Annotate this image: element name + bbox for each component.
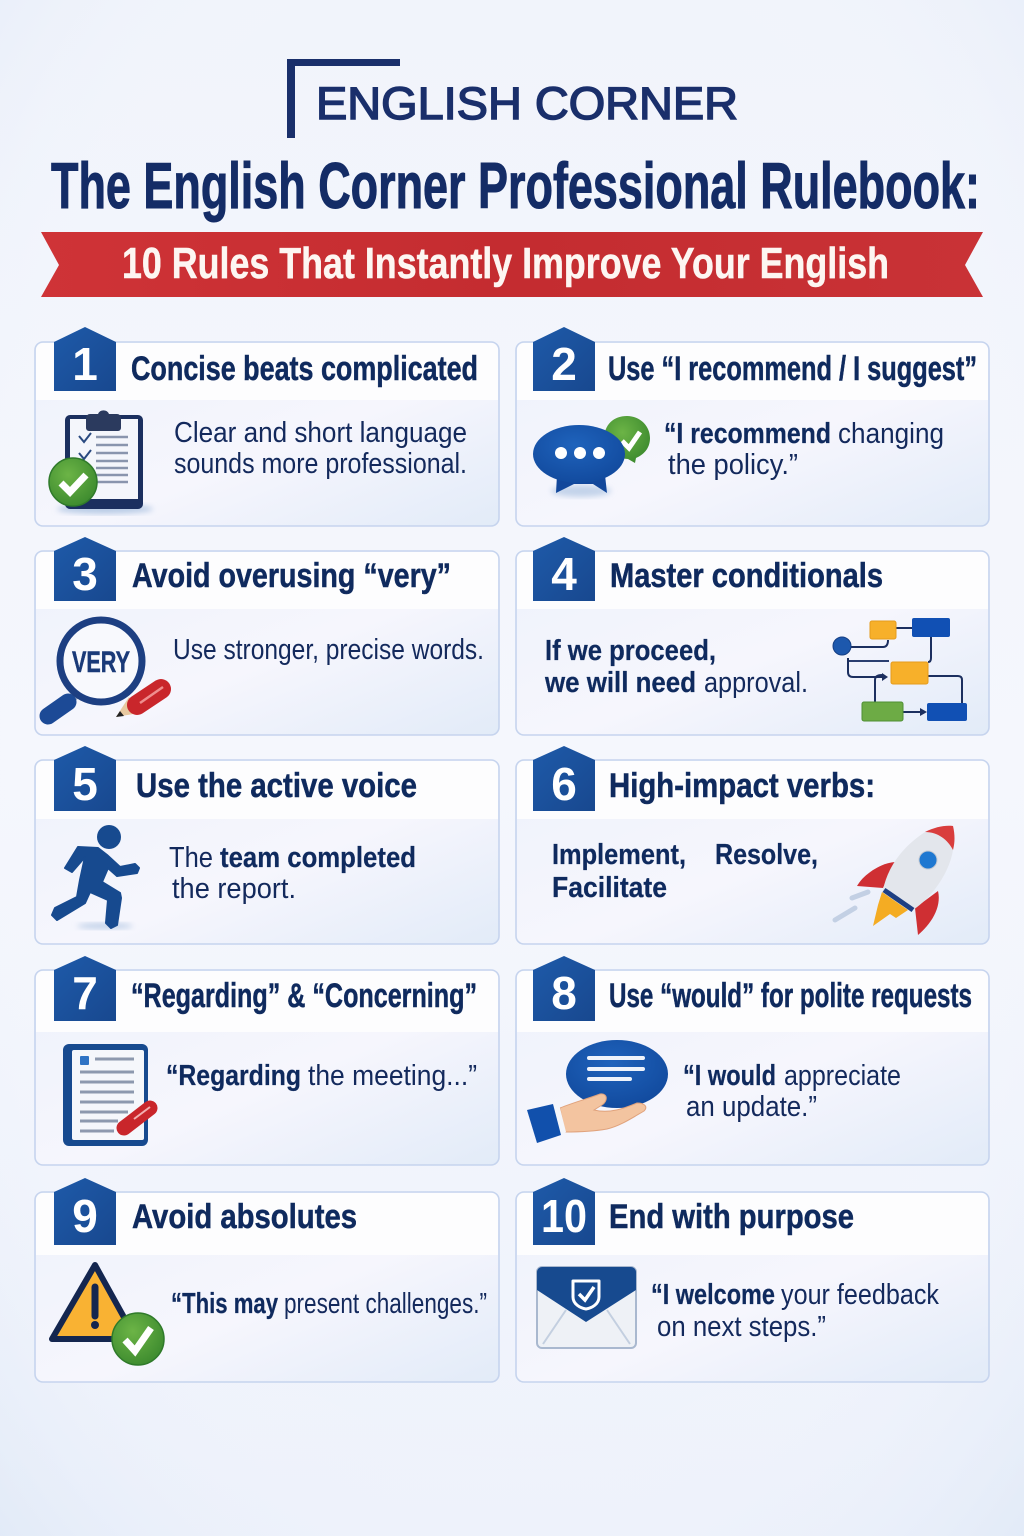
text 4: we will need — [544, 667, 696, 699]
text 1: sounds more professional. — [174, 448, 467, 480]
logo: English Corner — [287, 59, 738, 138]
badge 2 — [533, 327, 595, 391]
icon: speech bubbles — [533, 416, 650, 497]
badge 3 — [54, 537, 116, 601]
panel: rule 2 — [516, 327, 989, 526]
icon: envelope with check badge — [537, 1267, 636, 1348]
text 4: If we proceed, — [545, 635, 716, 667]
panel: rule 5 — [35, 746, 499, 944]
heading 10: End with purpose — [609, 1198, 854, 1236]
icon: rocket — [835, 826, 954, 935]
text 10 — [651, 1279, 939, 1343]
badge 7 — [54, 956, 116, 1021]
badge 4 — [533, 537, 595, 601]
icon: clipboard with check — [49, 410, 153, 514]
text 7: the meeting...” — [308, 1060, 477, 1092]
text 6 — [552, 839, 818, 904]
heading 5: Use the active voice — [136, 767, 417, 805]
text 1 — [174, 417, 467, 480]
text 6: Implement, — [552, 839, 686, 871]
badge 9: 9 — [72, 1190, 98, 1242]
badge 10: 10 — [541, 1190, 587, 1242]
panel: rule 9 — [35, 1178, 499, 1382]
text 8 — [683, 1060, 901, 1123]
text 10: “I welcome — [651, 1279, 775, 1311]
badge 1 — [54, 327, 116, 391]
badge 1: 1 — [72, 338, 98, 390]
badge 6 — [533, 746, 595, 811]
text 2 — [664, 418, 944, 481]
text 9: present challenges.” — [284, 1288, 487, 1320]
panel: rule 10 — [516, 1178, 989, 1382]
heading 4: Master conditionals — [610, 557, 883, 595]
badge 8 — [533, 956, 595, 1021]
text 8: an update.” — [686, 1091, 817, 1123]
icon: document and pencil — [63, 1044, 150, 1146]
icon: magnifier and pencil — [48, 620, 163, 717]
text 2: “I recommend — [664, 418, 831, 450]
panel: rule 4 — [516, 537, 989, 735]
badge 4: 4 — [551, 548, 577, 600]
text 7 — [166, 1060, 477, 1092]
text 8: “I would — [683, 1060, 776, 1092]
text 4: approval. — [704, 667, 808, 699]
text 3: Use stronger, precise words. — [173, 634, 484, 666]
badge 5: 5 — [72, 758, 98, 810]
icon: flowchart — [833, 618, 967, 721]
heading 9: Avoid absolutes — [132, 1198, 357, 1236]
text 7: “Regarding — [166, 1060, 301, 1092]
text 6: Facilitate — [552, 872, 667, 904]
text 5: the report. — [172, 873, 296, 905]
text 9 — [171, 1288, 487, 1320]
badge 5 — [54, 746, 116, 811]
heading 7: “Regarding” & “Concerning” — [131, 977, 477, 1015]
panel: rule 6 — [516, 746, 989, 944]
text 2: the policy.” — [668, 449, 798, 481]
heading 3: Avoid overusing “very” — [132, 557, 451, 595]
logo: English Corner: ENGLISH CORNER — [316, 78, 738, 129]
icon: running figure — [52, 825, 139, 929]
text 2: changing — [838, 418, 944, 450]
panel: rule 8 — [516, 956, 989, 1165]
subtitle ribbon — [41, 232, 983, 297]
text 5 — [169, 842, 416, 905]
text 10: on next steps.” — [657, 1311, 826, 1343]
text 5: The — [169, 842, 213, 874]
text 9: “This may — [171, 1288, 278, 1320]
badge 6: 6 — [551, 758, 577, 810]
heading 6: High-impact verbs: — [609, 767, 875, 805]
text 5: team completed — [220, 842, 416, 874]
badge 8: 8 — [551, 967, 577, 1019]
badge 7: 7 — [72, 967, 98, 1019]
icon: warning triangle with check — [52, 1265, 164, 1365]
panel: rule 3 — [35, 537, 499, 735]
badge 3: 3 — [72, 548, 98, 600]
text 8: appreciate — [784, 1060, 901, 1092]
panel: rule 1 — [35, 327, 499, 526]
text 6: Resolve, — [715, 839, 818, 871]
panel: rule 7 — [35, 956, 499, 1165]
badge 9 — [54, 1178, 116, 1245]
heading 1: Concise beats complicated — [131, 350, 478, 388]
icon: hand holding speech bubble — [527, 1040, 668, 1143]
badge 10 — [533, 1178, 595, 1245]
badge 2: 2 — [551, 338, 577, 390]
text 1: Clear and short language — [174, 417, 467, 449]
icon: magnifier and pencil: VERY — [72, 646, 130, 679]
text 10: your feedback — [781, 1279, 939, 1311]
text 4 — [544, 635, 808, 699]
